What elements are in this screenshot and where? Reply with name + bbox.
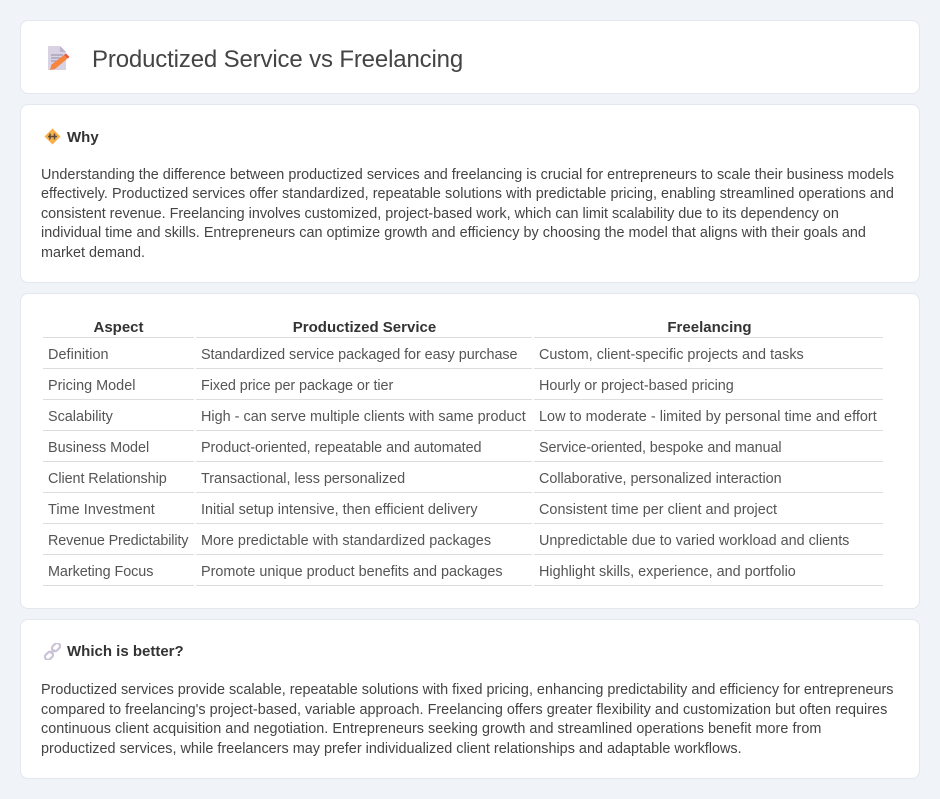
- row: time investment: Time Investment: [48, 502, 155, 518]
- row: marketing focus: Highlight skills, experience, and portfolio: [539, 564, 796, 580]
- panel: comparison table: [20, 293, 920, 609]
- row: time investment: Initial setup intensive, then efficient delivery: [201, 502, 478, 518]
- row: definition: Standardized service packaged for easy purchase: [201, 347, 518, 363]
- table header: Aspect: [93, 319, 144, 336]
- text block: why: individual time and skills. Entrepreneurs can optimize growth and efficiency by choosing the model that aligns with their goals and: [41, 225, 866, 241]
- row: revenue predictability: [48, 533, 849, 549]
- text block: which is better: compared to freelancing's project-based, variable approach. Freelancing offers greater flexibility and customization but often requires: [41, 702, 887, 718]
- row: scalability: [48, 409, 877, 425]
- text block: why: consistent revenue. Freelancing involves customized, project-based work, which can limit scalability due to its dependency on: [41, 206, 839, 222]
- row: scalability: Scalability: [48, 409, 113, 425]
- text block: why: Understanding the difference between productized services and freelancing is crucial for entrepreneurs to scale their business models: [41, 167, 894, 183]
- icon: document with pencil: [48, 46, 70, 70]
- text block: which is better: [41, 682, 893, 757]
- heading: which is better: Which is better?: [67, 643, 184, 660]
- row: client relationship: [48, 471, 782, 487]
- row: definition: Definition: [48, 347, 109, 363]
- text block: which is better: productized services, while freelancers may prefer individualized client relationships and adaptable workflows.: [41, 741, 742, 757]
- row: client relationship: Transactional, less personalized: [201, 471, 405, 487]
- panel: why: [20, 104, 920, 283]
- panel: which is better: [20, 619, 920, 779]
- row: marketing focus: Marketing Focus: [48, 564, 153, 580]
- row: client relationship: Collaborative, personalized interaction: [539, 471, 782, 487]
- row: revenue predictability: Unpredictable due to varied workload and clients: [539, 533, 849, 549]
- table header: Freelancing: [667, 319, 752, 336]
- row: revenue predictability: Revenue Predictability: [48, 533, 188, 549]
- row: definition: Custom, client-specific projects and tasks: [539, 347, 804, 363]
- icon: warning diamond: [44, 128, 60, 144]
- row: time investment: Consistent time per client and project: [539, 502, 777, 518]
- row: business model: Service-oriented, bespoke and manual: [539, 440, 781, 456]
- row: client relationship: Client Relationship: [48, 471, 167, 487]
- text block: why: [41, 167, 894, 261]
- row: business model: Business Model: [48, 440, 149, 456]
- row: pricing model: Fixed price per package or tier: [201, 378, 393, 394]
- row: marketing focus: [48, 564, 796, 580]
- row: business model: [48, 440, 781, 456]
- row: definition: [48, 347, 804, 363]
- row: scalability: Low to moderate - limited by personal time and effort: [539, 409, 877, 425]
- row: business model: Product-oriented, repeatable and automated: [201, 440, 482, 456]
- text block: why: effectively. Productized services offer standardized, repeatable solutions with predictable pricing, enabling streamlined operations and: [41, 186, 894, 202]
- table header: [93, 319, 752, 336]
- row: pricing model: Pricing Model: [48, 378, 135, 394]
- row: pricing model: [48, 378, 734, 394]
- text block: why: market demand.: [41, 245, 145, 261]
- text block: which is better: Productized services provide scalable, repeatable solutions with fixed pricing, enhancing predictability and efficiency for entrepreneurs: [41, 682, 893, 698]
- heading: why: Why: [67, 129, 99, 146]
- row: marketing focus: Promote unique product benefits and packages: [201, 564, 503, 580]
- row: pricing model: Hourly or project-based pricing: [539, 378, 734, 394]
- title: Productized Service vs Freelancing: [92, 46, 463, 73]
- table header: Productized Service: [293, 319, 436, 336]
- header panel: [20, 20, 920, 94]
- row: revenue predictability: More predictable with standardized packages: [201, 533, 491, 549]
- row: time investment: [48, 502, 777, 518]
- icon: link: [44, 643, 61, 660]
- text block: which is better: continuous client acquisition and negotiation. Entrepreneurs seeking growth and streamlined operations benefit more from: [41, 721, 821, 737]
- row: scalability: High - can serve multiple clients with same product: [201, 409, 526, 425]
